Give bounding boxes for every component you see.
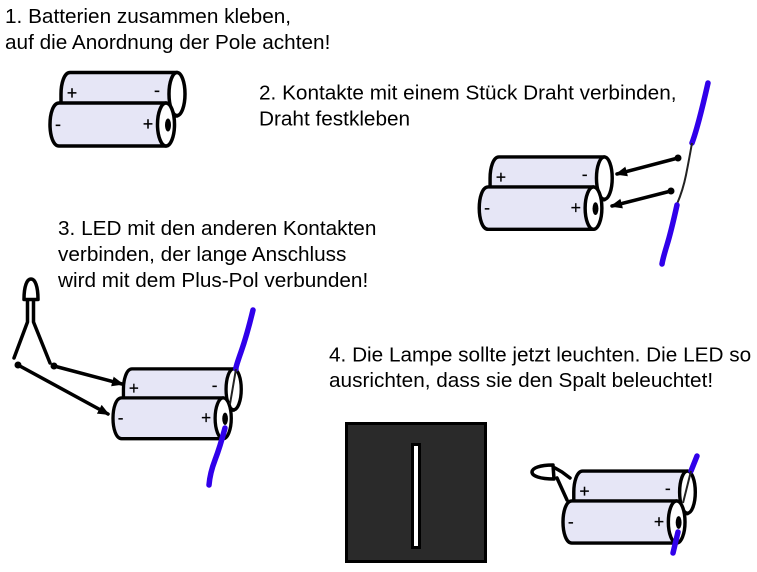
heading: step 2: 2. Kontakte mit einem Stück Draht verbinden, xyxy=(259,82,677,104)
batteries: step 3: - xyxy=(118,409,123,428)
arrow: wire end to plus contact xyxy=(612,188,674,206)
heading: step 1: auf die Anordnung der Pole achten! xyxy=(5,31,330,54)
heading: step 3: wird mit dem Plus-Pol verbunden! xyxy=(57,269,368,292)
icon: LED xyxy=(14,279,50,363)
heading: step 4: 4. Die Lampe sollte jetzt leuchten. Die LED so xyxy=(329,344,751,366)
batteries: step 1: + xyxy=(143,114,153,134)
batteries: step 1 xyxy=(50,72,185,146)
batteries: step 2: + xyxy=(571,198,581,218)
heading: step 4: ausrichten, dass sie den Spalt beleuchtet! xyxy=(329,369,713,392)
batteries: step 4: - xyxy=(665,478,671,498)
heading: step 3: verbinden, der lange Anschluss xyxy=(58,243,346,266)
batteries: step 4: + xyxy=(654,511,664,531)
batteries: step 3: - xyxy=(212,376,218,395)
panel: slit in dark card xyxy=(346,424,486,562)
heading: step 3: 3. LED mit den anderen Kontakten xyxy=(58,217,376,240)
batteries: step 2 xyxy=(479,157,612,229)
arrow: wire end to minus contact xyxy=(617,154,682,174)
heading: step 1: 1. Batterien zusammen kleben, xyxy=(5,5,291,28)
wire: step 2 xyxy=(662,83,708,264)
batteries: step 1: + xyxy=(67,83,77,103)
batteries: step 3: + xyxy=(201,409,211,428)
batteries: step 2: + xyxy=(496,167,506,187)
arrow: short lead to minus pole xyxy=(14,362,108,414)
batteries: step 4 xyxy=(563,471,695,543)
batteries: step 4: + xyxy=(579,481,590,501)
batteries: step 2: - xyxy=(484,198,490,218)
arrow: long lead to plus pole xyxy=(50,362,122,384)
batteries: step 3: + xyxy=(129,379,139,398)
batteries: step 3 xyxy=(113,369,241,439)
wire: step 3 xyxy=(209,310,253,485)
icon: LED on batteries xyxy=(532,465,570,500)
batteries: step 2: - xyxy=(582,164,588,184)
wire: step 4 xyxy=(673,456,697,553)
batteries: step 1: - xyxy=(55,114,61,134)
batteries: step 4: - xyxy=(568,511,574,531)
heading: step 2: Draht festkleben xyxy=(259,108,410,130)
batteries: step 1: - xyxy=(154,80,160,100)
